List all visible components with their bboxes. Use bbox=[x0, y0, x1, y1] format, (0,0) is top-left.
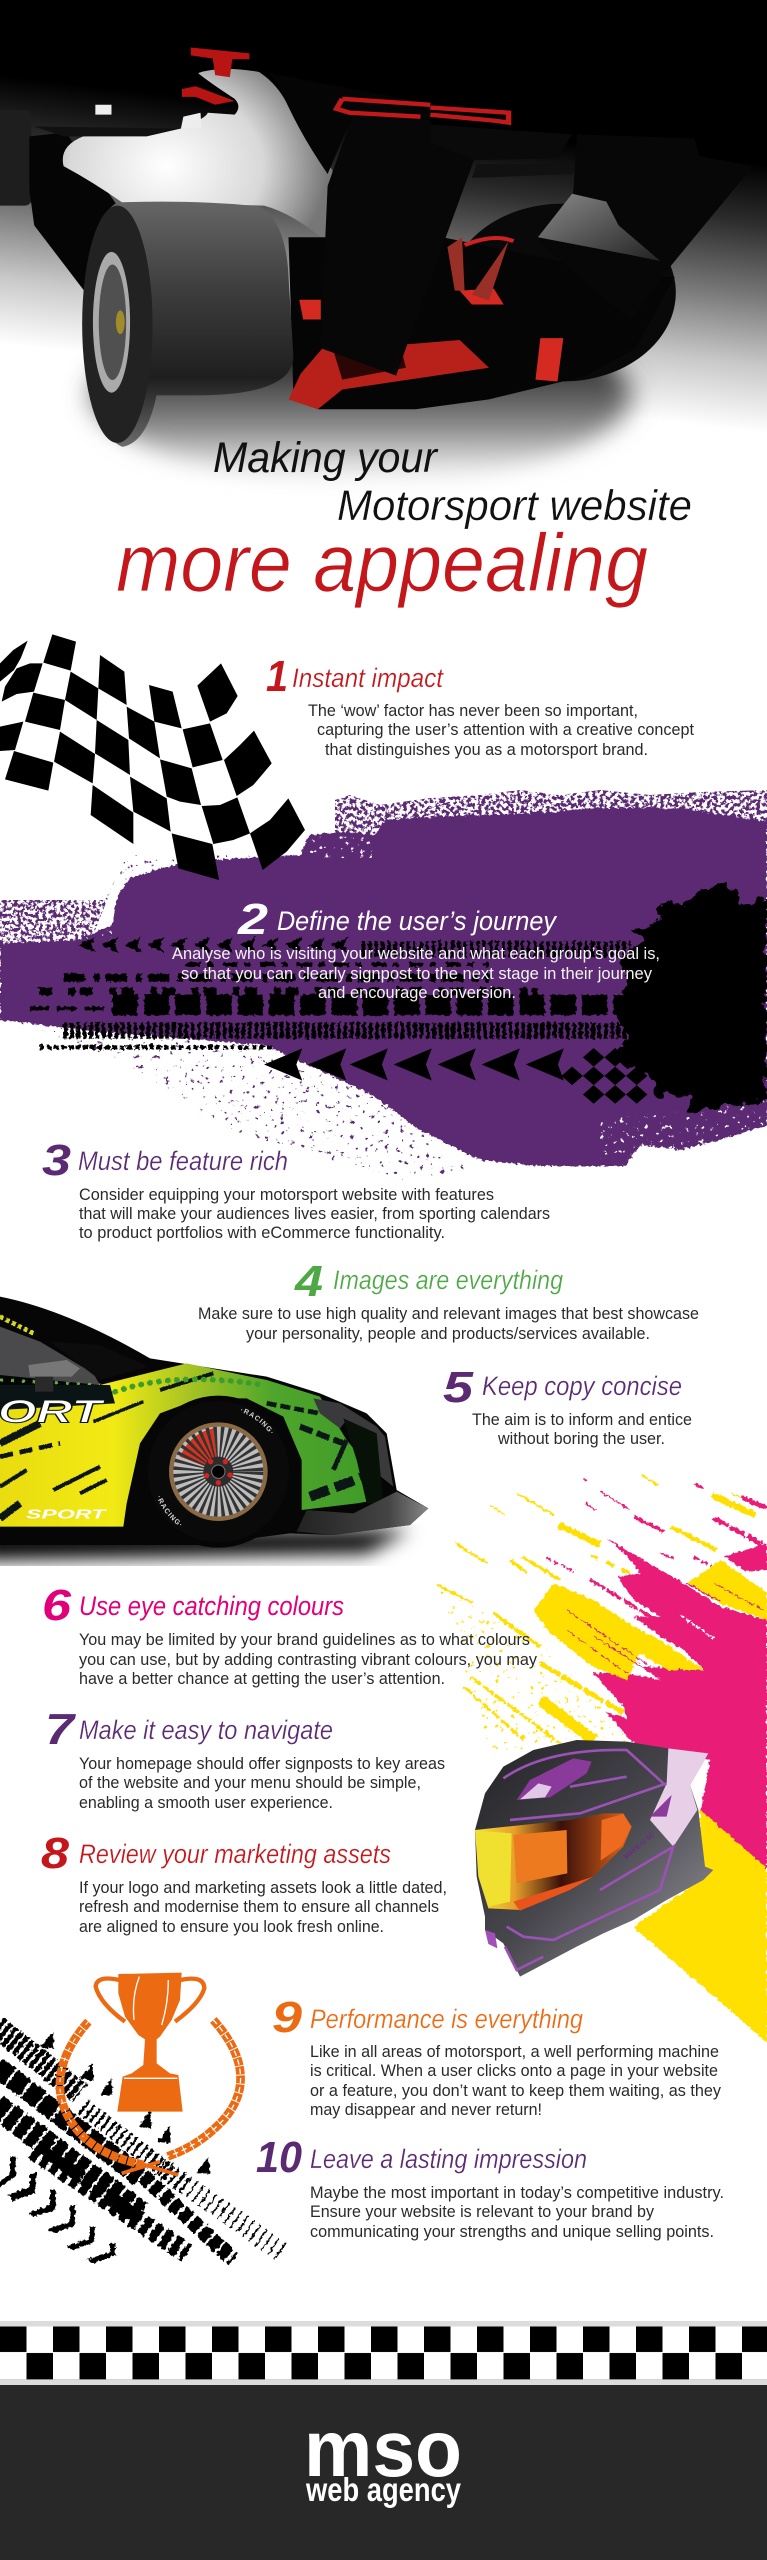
item 8: review your marketing assets bbox=[41, 1829, 447, 1936]
rear centre bbox=[289, 237, 675, 409]
item 5: keep copy concise: 5 bbox=[443, 1363, 474, 1412]
item 6: use eye catching colours bbox=[42, 1581, 538, 1688]
item 9: performance is everything: Like in all areas of motorsport, a well performing machine bbox=[310, 2043, 719, 2061]
footer: mso web agency logo bbox=[0, 2385, 767, 2560]
wheel rim bbox=[93, 252, 130, 393]
icon: chequered flag bbox=[0, 634, 305, 880]
title: more appealing bbox=[116, 518, 648, 609]
item 2: define the user's journey: 2 bbox=[237, 895, 269, 944]
right rear tyre bbox=[449, 204, 676, 382]
item 8: review your marketing assets: Review your marketing assets bbox=[79, 1839, 391, 1869]
item 3: must be feature rich bbox=[42, 1136, 550, 1242]
nose intake bbox=[313, 1398, 393, 1487]
car floor reflection bbox=[93, 310, 631, 480]
tyre track under trophy bbox=[0, 2027, 283, 2263]
wheel arch bbox=[142, 1396, 294, 1548]
big rear tyre bbox=[85, 202, 293, 447]
item 8: review your marketing assets: are aligned to ensure you look fresh online. bbox=[79, 1918, 384, 1936]
purple tyre-track grunge panel bbox=[0, 790, 767, 1180]
item 5: keep copy concise: The aim is to inform and entice bbox=[472, 1411, 692, 1429]
white flecks in pink bbox=[680, 1615, 714, 1638]
big arrow treads bbox=[264, 1048, 564, 1081]
small diamond checks bbox=[561, 1048, 647, 1104]
item 2: define the user's journey bbox=[172, 895, 660, 1002]
middle rear wing bbox=[430, 125, 572, 160]
red diffuser bbox=[289, 340, 489, 409]
item 6: use eye catching colours: Use eye catching colours bbox=[79, 1591, 344, 1621]
car silver body bbox=[63, 69, 333, 241]
engine cover bbox=[269, 73, 430, 174]
pink streaks bbox=[547, 1478, 767, 1627]
item 10: leave a lasting impression: communicating your strengths and unique selling points. bbox=[310, 2223, 714, 2241]
item 6: use eye catching colours: You may be limited by your brand guidelines as to what colours bbox=[79, 1631, 530, 1649]
item 2: define the user's journey: so that you can clearly signpost to the next stage in their journey bbox=[181, 965, 653, 983]
hero: racing car on dark backdrop bbox=[0, 0, 767, 560]
item 9: performance is everything: 9 bbox=[272, 1993, 303, 2042]
item 9: performance is everything bbox=[272, 1993, 722, 2119]
cockpit details bbox=[95, 105, 201, 129]
item 1: instant impact bbox=[266, 652, 694, 759]
door panel strip bbox=[0, 1385, 115, 1410]
yellow lower wedge bbox=[633, 1810, 767, 2043]
livery bbox=[0, 1363, 377, 1527]
item 7: make it easy to navigate: Your homepage should offer signposts to key areas bbox=[79, 1755, 445, 1773]
item 7: make it easy to navigate: 7 bbox=[45, 1705, 77, 1754]
item 6: use eye catching colours: you can use, but by adding contrasting vibrant colours, you may bbox=[79, 1651, 538, 1669]
tread chevrons bbox=[0, 2157, 115, 2263]
item 7: make it easy to navigate: Make it easy to navigate bbox=[79, 1715, 333, 1745]
pink top cluster bbox=[724, 1543, 767, 1572]
illustration: green and yellow race car: SPORT bbox=[26, 1507, 108, 1521]
helmet spoiler bbox=[650, 1748, 708, 1847]
yellow speckle bbox=[440, 1590, 640, 1760]
footer: mso web agency logo: mso bbox=[304, 2404, 462, 2493]
item 3: must be feature rich: that will make your audiences lives easier, from sporting calendars bbox=[79, 1205, 550, 1223]
item 3: must be feature rich: 3 bbox=[42, 1136, 71, 1185]
red mirrors bbox=[182, 47, 249, 105]
front wheel bbox=[158, 1408, 273, 1526]
wing mirror bbox=[28, 1360, 80, 1377]
helmet vent bbox=[517, 1758, 592, 1800]
livery tears bbox=[0, 1317, 373, 1518]
item 9: performance is everything: is critical. When a user clicks onto a page in your website bbox=[310, 2062, 718, 2080]
item 1: instant impact: 1 bbox=[266, 652, 288, 701]
item 10: leave a lasting impression: Ensure your website is relevant to your brand by bbox=[310, 2203, 655, 2221]
item 1: instant impact: Instant impact bbox=[292, 663, 444, 693]
pink threads over yellow bbox=[567, 1583, 764, 1673]
chequered footer band bbox=[0, 2321, 767, 2385]
black splat bbox=[611, 884, 767, 1114]
red rear lights bbox=[299, 289, 563, 382]
item 4: images are everything: 4 bbox=[294, 1257, 323, 1306]
tread triangles bbox=[40, 2032, 210, 2173]
red wing fins bbox=[336, 99, 509, 123]
item 10: leave a lasting impression bbox=[256, 2133, 724, 2241]
item 2: define the user's journey: Analyse who is visiting your website and what each group’s goal is, bbox=[172, 945, 660, 963]
laurel wreath bbox=[60, 2020, 241, 2175]
paint splash: pink and yellow bbox=[437, 1475, 767, 2043]
item 7: make it easy to navigate bbox=[45, 1705, 445, 1812]
item 9: performance is everything: Performance is everything bbox=[310, 2004, 583, 2034]
item 8: review your marketing assets: If your logo and marketing assets look a little dated, bbox=[79, 1879, 447, 1897]
item 2: define the user's journey: and encourage conversion. bbox=[318, 984, 516, 1002]
item 9: performance is everything: may disappear and never return! bbox=[310, 2101, 542, 2119]
yellow main patch bbox=[534, 1583, 704, 1680]
item 4: images are everything: Make sure to use high quality and relevant images that best showcase bbox=[198, 1305, 699, 1323]
helmet chin tip bbox=[485, 1930, 497, 1948]
item 3: must be feature rich: Consider equipping your motorsport website with features bbox=[79, 1186, 494, 1204]
item 10: leave a lasting impression: Maybe the most important in today’s competitive industry. bbox=[310, 2184, 724, 2202]
item 6: use eye catching colours: 6 bbox=[42, 1581, 72, 1630]
grunge fringe bbox=[0, 790, 767, 1180]
black tyre tracks bbox=[29, 937, 631, 1047]
item 6: use eye catching colours: have a better chance at getting the user’s attention. bbox=[79, 1670, 445, 1688]
item 7: make it easy to navigate: enabling a smooth user experience. bbox=[79, 1794, 333, 1812]
car silhouette bbox=[0, 1297, 428, 1545]
car side pod bbox=[29, 132, 117, 293]
item 9: performance is everything: or a feature, you don’t want to keep them waiting, as they bbox=[310, 2082, 722, 2100]
far front tyre bbox=[0, 110, 31, 206]
illustration: racing helmet bbox=[475, 1740, 713, 1977]
item 5: keep copy concise bbox=[443, 1363, 692, 1448]
item 4: images are everything: your personality, people and products/services available. bbox=[246, 1325, 650, 1343]
pink solid wedge bbox=[594, 1538, 767, 1868]
yellow distant streaks bbox=[437, 1475, 755, 1743]
item 8: review your marketing assets: 8 bbox=[41, 1829, 70, 1878]
item 8: review your marketing assets: refresh and modernise them to ensure all channels bbox=[79, 1898, 439, 1916]
item 3: must be feature rich: Must be feature rich bbox=[78, 1146, 288, 1176]
item 1: instant impact: that distinguishes you as a motorsport brand. bbox=[325, 741, 648, 759]
helmet stripes bbox=[503, 1750, 673, 1970]
tyre lettering: ·RACING· bbox=[241, 1408, 273, 1434]
item 1: instant impact: capturing the user’s attention with a creative concept bbox=[317, 721, 694, 739]
item 3: must be feature rich: to product portfolios with eCommerce functionality. bbox=[79, 1224, 445, 1242]
item 10: leave a lasting impression: Leave a lasting impression bbox=[310, 2144, 587, 2174]
item 5: keep copy concise: Keep copy concise bbox=[482, 1371, 682, 1401]
item 4: images are everything: Images are everything bbox=[333, 1265, 563, 1295]
helmet lettering: MAKE-U SC bbox=[623, 1831, 656, 1861]
item 4: images are everything bbox=[198, 1257, 699, 1343]
title bbox=[116, 434, 692, 609]
splitter bbox=[297, 1492, 428, 1535]
item 5: keep copy concise: without boring the user. bbox=[497, 1430, 665, 1448]
item 7: make it easy to navigate: of the website and your menu should be simple, bbox=[79, 1774, 421, 1792]
ground shadow bbox=[0, 1530, 410, 1560]
title: Making your bbox=[213, 434, 439, 482]
title: Motorsport website bbox=[337, 482, 692, 530]
footer: mso web agency logo: web agency bbox=[305, 2471, 462, 2508]
helmet visor bbox=[475, 1813, 632, 1910]
icon: orange trophy with laurel wreath bbox=[60, 1973, 241, 2175]
item 1: instant impact: The ‘wow’ factor has never been so important, bbox=[308, 702, 638, 720]
item 2: define the user's journey: Define the user’s journey bbox=[277, 906, 557, 936]
item 10: leave a lasting impression: 10 bbox=[256, 2133, 302, 2182]
windscreen bbox=[0, 1327, 100, 1385]
illustration: green and yellow race car bbox=[0, 1296, 428, 1566]
left wing endplate bbox=[320, 111, 477, 376]
right wing endplate bbox=[538, 134, 753, 320]
front wheel: ·RACING· bbox=[158, 1496, 182, 1526]
